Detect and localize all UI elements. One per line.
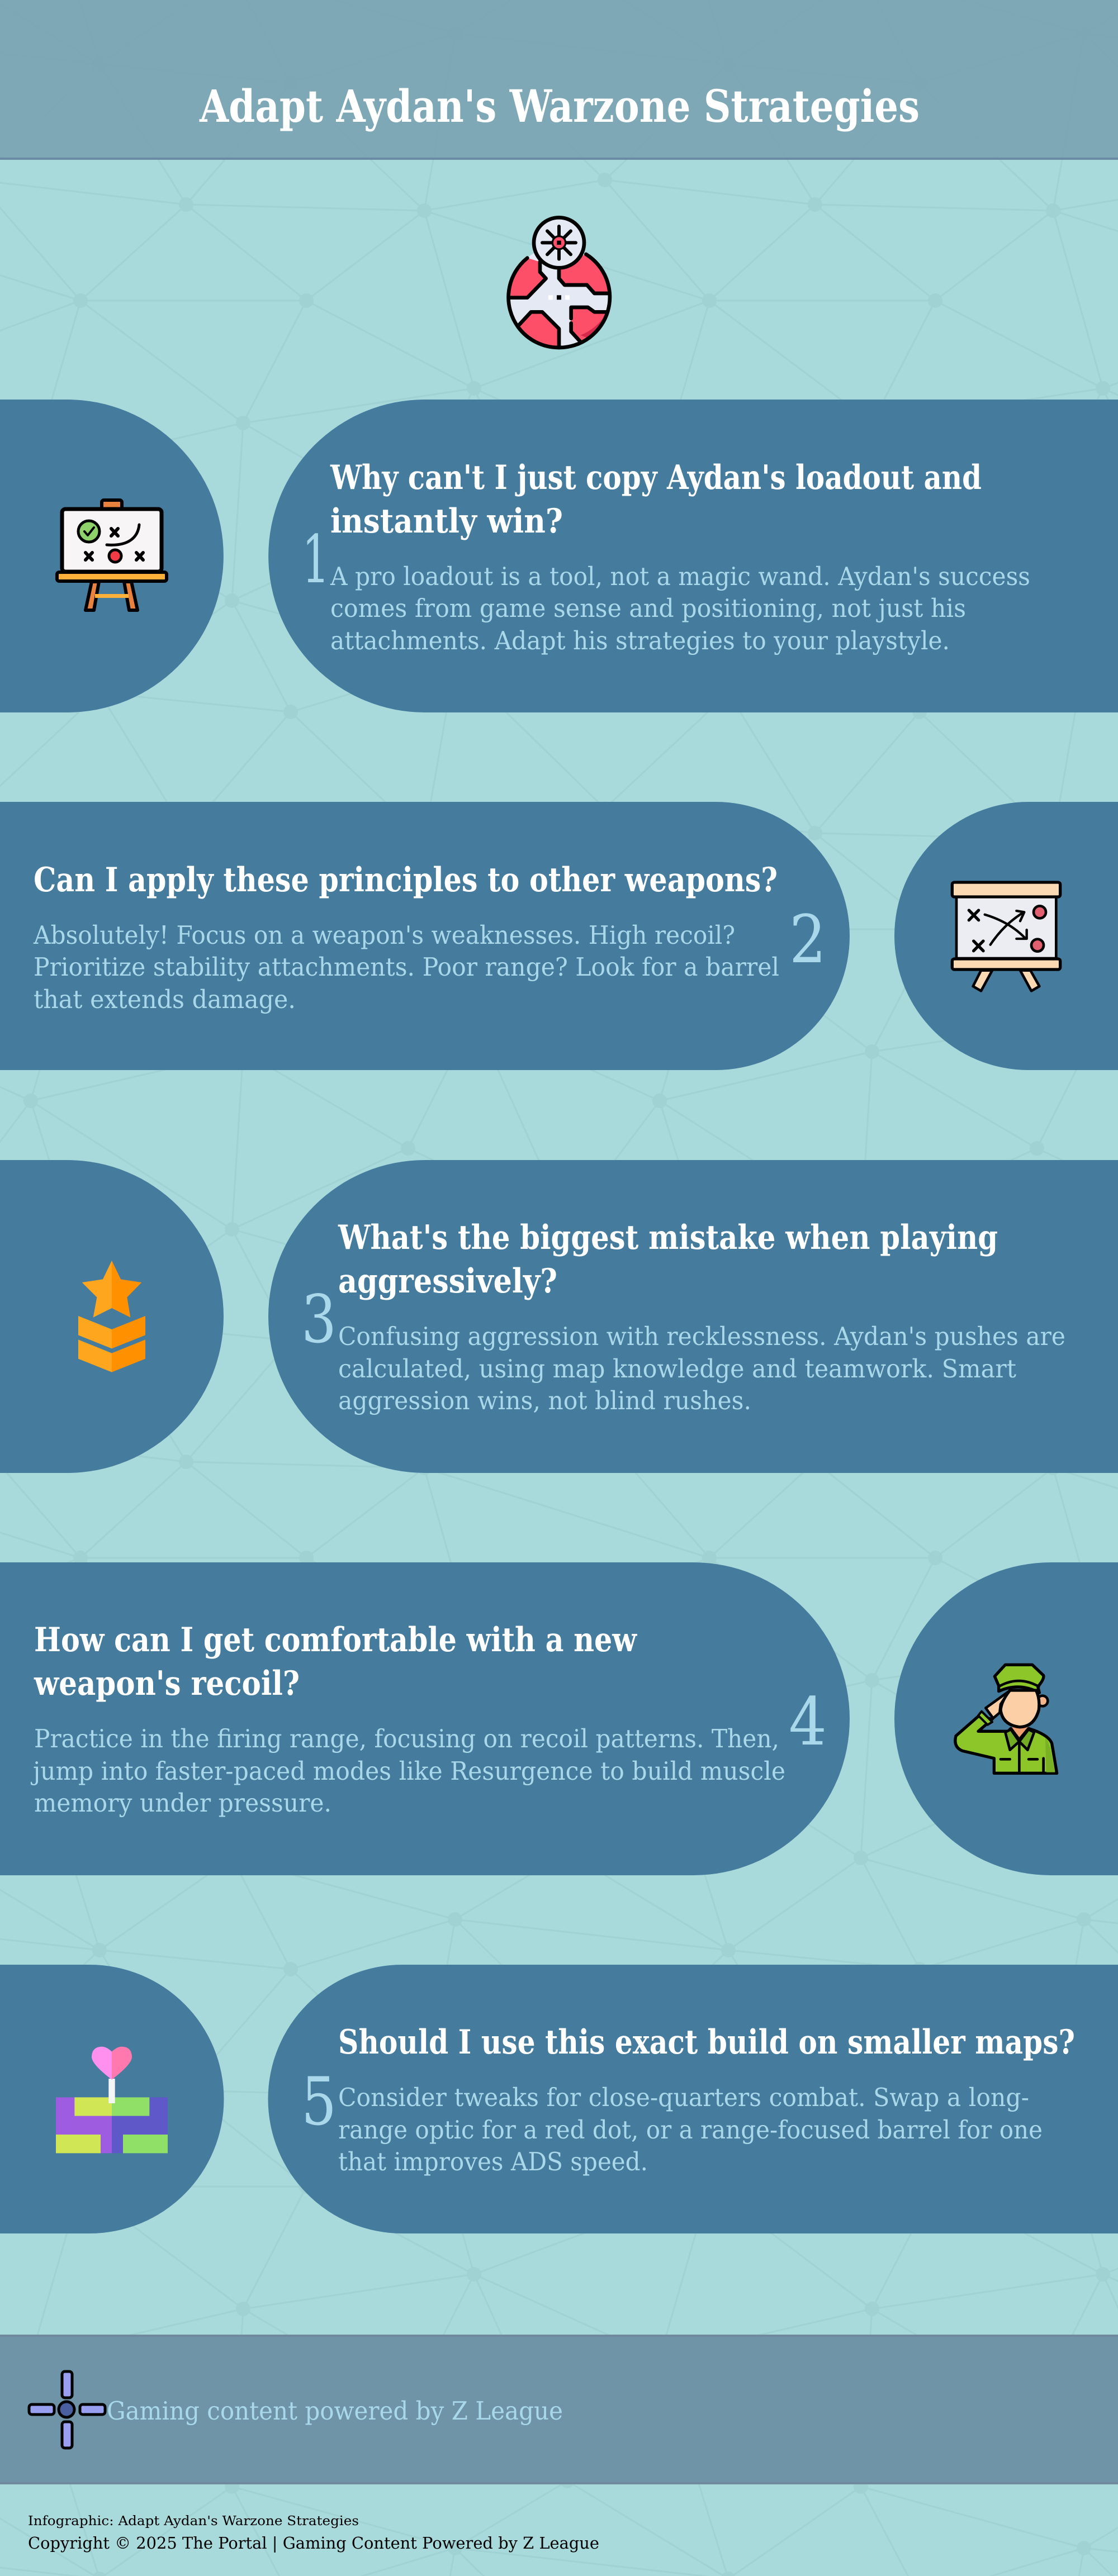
- footer band: [0, 2335, 1118, 2484]
- question 4 heading: weapon's recoil?: [34, 1664, 300, 1703]
- icon panel 3: [0, 1160, 224, 1473]
- panel: question 5: [0, 1965, 1118, 2233]
- question 1 heading: instantly win?: [330, 502, 563, 541]
- question 2 answer: that extends damage.: [34, 985, 296, 1014]
- icon: crosshair: [29, 2371, 105, 2448]
- text panel 2: [0, 802, 850, 1070]
- number 4: 4: [789, 1683, 827, 1760]
- question 4 answer: Practice in the firing range, focusing on recoil patterns. Then,: [34, 1724, 779, 1753]
- text panel 4: [0, 1562, 850, 1875]
- icon: globe with virus: [509, 217, 610, 348]
- number 2: 2: [789, 901, 826, 978]
- title: Adapt Aydan's Warzone Strategies: [199, 80, 920, 132]
- question 3 answer: aggression wins, not blind rushes.: [338, 1386, 751, 1415]
- question 2 answer: [33, 920, 779, 1014]
- question 2 answer: Prioritize stability attachments. Poor range? Look for a barrel: [34, 952, 779, 982]
- icon panel 1: [0, 400, 224, 712]
- header band: [0, 0, 1118, 160]
- question 3 heading: [338, 1218, 998, 1301]
- question 1 answer: A pro loadout is a tool, not a magic wand. Aydan's success: [330, 562, 1030, 591]
- icon: game blocks with heart: [56, 2047, 168, 2153]
- text panel 5: [268, 1965, 1118, 2233]
- icon: saluting soldier: [955, 1665, 1057, 1773]
- panel: question 2: [0, 802, 1118, 1070]
- question 3 answer: [338, 1322, 1065, 1415]
- question 3 heading: What's the biggest mistake when playing: [338, 1218, 998, 1257]
- question 4 answer: [30, 1724, 785, 1818]
- number 1: 1: [302, 521, 330, 598]
- question 1 heading: Why can't I just copy Aydan's loadout and: [330, 458, 982, 497]
- question 1 heading: [330, 458, 982, 541]
- panel: question 1: [0, 400, 1118, 712]
- question 3 heading: aggressively?: [338, 1262, 557, 1301]
- question 4 heading: How can I get comfortable with a new: [34, 1620, 637, 1660]
- question 4 answer: jump into faster-paced modes like Resurgence to build muscle: [30, 1756, 785, 1786]
- text panel 1: [268, 400, 1118, 712]
- question 2 heading: Can I apply these principles to other weapons?: [34, 861, 778, 900]
- question 4 answer: memory under pressure.: [34, 1788, 331, 1818]
- icon: tactics easel: [57, 500, 167, 610]
- icon panel 2: [894, 802, 1118, 1070]
- question 2 answer: Absolutely! Focus on a weapon's weaknesses. High recoil?: [33, 920, 735, 950]
- number 3: 3: [301, 1281, 337, 1358]
- question 5 answer: Consider tweaks for close-quarters combat. Swap a long-: [338, 2083, 1029, 2112]
- text panel 3: [268, 1160, 1118, 1473]
- question 3 answer: Confusing aggression with recklessness. Aydan's pushes are: [338, 1322, 1065, 1351]
- question 4 heading: [34, 1620, 637, 1703]
- icon panel 4: [894, 1562, 1118, 1875]
- question 5 answer: that improves ADS speed.: [338, 2147, 648, 2176]
- icon: tactics board: [952, 882, 1060, 991]
- panel: question 3: [0, 1160, 1118, 1473]
- panel: question 4: [0, 1562, 1118, 1875]
- question 1 answer: [330, 562, 1030, 655]
- question 5 answer: range optic for a red dot, or a range-focused barrel for one: [338, 2115, 1043, 2145]
- icon panel 5: [0, 1965, 224, 2233]
- source line: Infographic: Adapt Aydan's Warzone Strategies: [28, 2514, 359, 2529]
- question 1 answer: attachments. Adapt his strategies to your playstyle.: [330, 626, 950, 655]
- number 5: 5: [301, 2063, 337, 2140]
- footer tagline: Gaming content powered by Z League: [107, 2396, 563, 2426]
- copyright line: Copyright © 2025 The Portal | Gaming Content Powered by Z League: [28, 2534, 599, 2553]
- question 5 answer: [338, 2083, 1043, 2176]
- question 1 answer: comes from game sense and positioning, not just his: [330, 593, 966, 623]
- question 3 answer: calculated, using map knowledge and teamwork. Smart: [338, 1354, 1016, 1384]
- icon: rank star and chevrons: [78, 1261, 145, 1372]
